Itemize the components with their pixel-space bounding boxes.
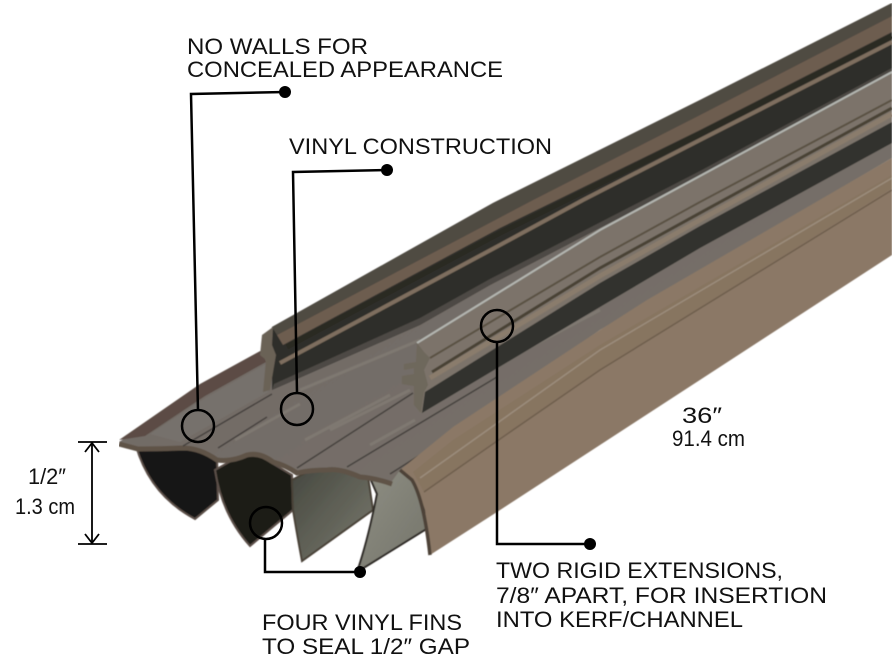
label text: INTO KERF/CHANNEL [496,607,743,632]
leader line [293,170,387,393]
target circle [182,410,214,442]
target circle [481,310,513,342]
floor grooves [183,377,497,474]
callout: rigid extensions [481,310,827,632]
leader line [191,92,285,411]
extension 2 end cap [402,343,430,413]
length dimension [672,403,745,451]
length dimension: 91.4 cm [672,426,745,451]
fin 3 [292,465,373,561]
height label: 1.3 cm [15,494,75,519]
leader dot [381,164,393,176]
target circle [281,393,313,425]
callout: vinyl construction [281,134,552,425]
fin 2 [215,450,293,546]
leader dot [584,538,596,550]
height dimension [15,442,107,544]
height label [15,464,75,519]
rigid extension 1 [260,3,892,392]
floor surface [119,3,892,484]
rigid extension 2 [402,72,892,413]
leader dot [279,86,291,98]
leader line [265,539,360,572]
tan outer flap [400,158,892,555]
label text: TWO RIGID EXTENSIONS, [496,558,783,583]
label text: VINYL CONSTRUCTION [289,134,552,159]
height arrow [78,442,107,544]
height label: 1/2″ [28,464,66,489]
label text [262,610,470,659]
callout: no walls [182,34,503,442]
label text [187,34,503,82]
length dimension: 36″ [682,403,722,428]
leader line [497,342,590,544]
label text: NO WALLS FOR [187,34,368,59]
product photo: door sweep [119,3,892,572]
fin 4 [357,468,428,572]
target circle [250,507,282,539]
label text: TO SEAL 1/2″ GAP [262,634,470,659]
label text: 7/8″ APART, FOR INSERTION [496,583,827,608]
label text: CONCEALED APPEARANCE [187,57,503,82]
left wall strip [119,350,266,440]
fin 1 [136,440,218,519]
leader dot [354,566,366,578]
label text [496,558,827,632]
extension 1 end cap [260,327,276,392]
floor front edge [119,444,392,484]
label text: FOUR VINYL FINS [262,610,462,635]
callout: vinyl fins [250,507,470,659]
